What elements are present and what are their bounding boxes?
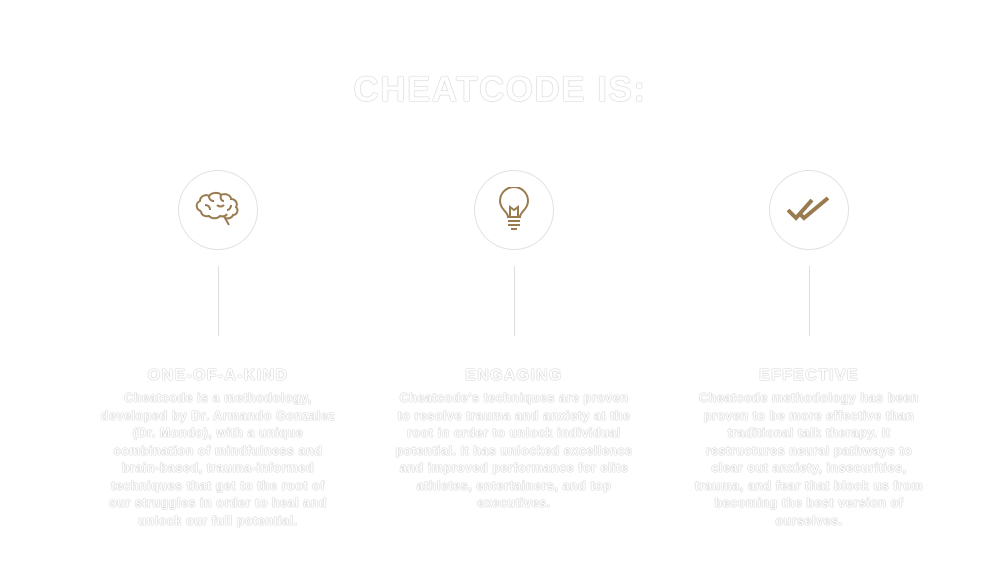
body text: proven to be more effective than xyxy=(704,408,914,422)
body text xyxy=(694,391,923,528)
body text: Cheatcode's techniques are proven xyxy=(400,391,628,405)
body text: techniques that get to the root of xyxy=(111,478,325,492)
body text: restructures neural pathways to xyxy=(706,444,912,458)
body text: becoming the best version of xyxy=(714,496,904,510)
body text: to resolve trauma and anxiety at the xyxy=(397,408,631,422)
body text xyxy=(100,391,335,528)
body text: executives. xyxy=(477,496,551,510)
body text: trauma, and fear that block us from xyxy=(695,478,923,492)
heading: ENGAGING xyxy=(465,367,563,384)
body text: potential. It has unlocked excellence xyxy=(395,444,633,458)
body text: unlock our full potential. xyxy=(138,514,298,528)
body text: root in order to unlock individual xyxy=(407,426,621,440)
body text xyxy=(395,391,633,510)
body text: combination of mindfulness and xyxy=(114,444,322,458)
body text: Cheatcode methodology has been xyxy=(699,391,919,405)
panel: effective xyxy=(694,170,923,528)
panel: one-of-a-kind xyxy=(100,170,335,528)
body text: (Dr. Mondo), with a unique xyxy=(133,426,303,440)
body text: our struggles in order to heal and xyxy=(109,496,327,510)
body text: developed by Dr. Armando Gonzalez xyxy=(101,408,335,422)
heading: ONE-OF-A-KIND xyxy=(148,367,288,384)
heading: EFFECTIVE xyxy=(759,367,859,384)
title: CHEATCODE IS: xyxy=(353,70,647,109)
icon: lightbulb xyxy=(474,170,554,250)
body text: clear out anxiety, insecurities, xyxy=(711,461,907,475)
body text: and improved performance for elite xyxy=(400,461,628,475)
body text: brain-based, trauma-informed xyxy=(122,461,314,475)
icon: double check xyxy=(769,170,849,250)
body text: traditional talk therapy. It xyxy=(727,426,891,440)
panel: engaging xyxy=(395,170,633,510)
icon: brain xyxy=(178,170,258,250)
body text: Cheatcode is a methodology, xyxy=(124,391,312,405)
body text: athletes, entertainers, and top xyxy=(417,478,611,492)
body text: ourselves. xyxy=(775,514,843,528)
